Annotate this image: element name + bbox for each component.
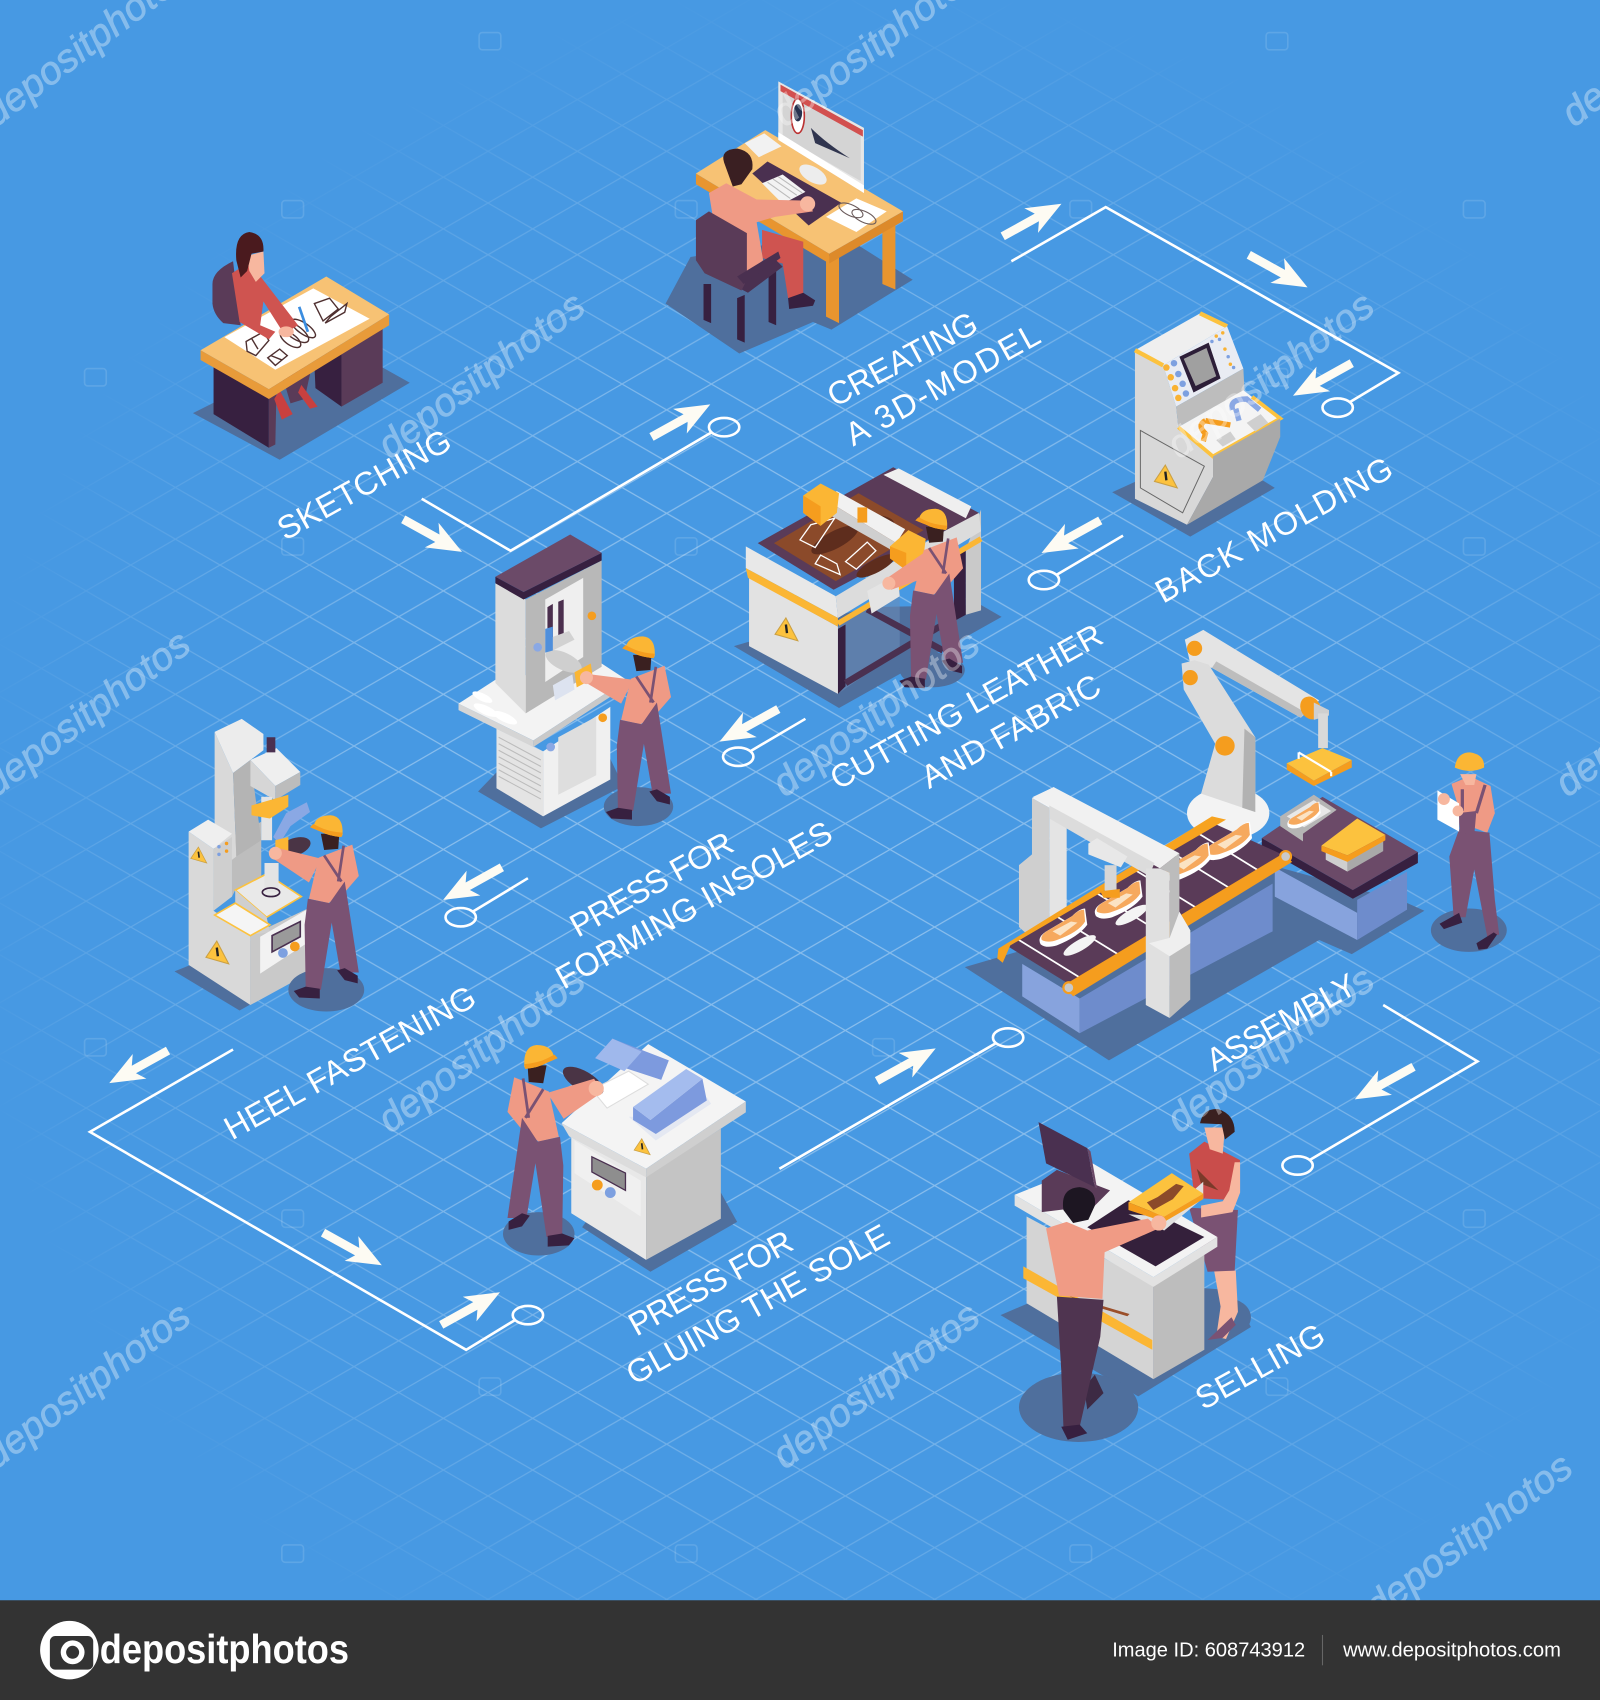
footer bar: depositphotos: [100, 1626, 349, 1672]
right gantry post: [1146, 853, 1190, 1018]
watermarks: depositphotos: [370, 284, 593, 467]
station: press for gluing the sole: [562, 1039, 746, 1272]
stock photo camera marks: [85, 33, 1485, 1562]
flow connector: sketching to insole press: [396, 392, 739, 564]
station: selling counter: [1001, 1109, 1251, 1442]
flow connector: heel fastening to gluing press: [90, 1038, 543, 1350]
step labels: HEEL FASTENING: [218, 979, 482, 1147]
footer logo icon: [40, 1621, 99, 1679]
conveyor: [997, 816, 1292, 1033]
keyboard and papers: [745, 133, 887, 232]
step labels: CUTTING LEATHER: [824, 617, 1109, 796]
station: assembly line: [965, 630, 1424, 1060]
step labels: BACK MOLDING: [1149, 450, 1399, 610]
footer bar: [0, 1600, 1600, 1700]
step labels: GLUING THE SOLE: [620, 1217, 895, 1392]
worker supervising assembly: [1431, 752, 1507, 952]
saleswoman: [1189, 1109, 1240, 1340]
step labels: AND FABRIC: [915, 667, 1107, 795]
watermarks: depositphotos: [370, 958, 593, 1141]
base cabinet: [496, 707, 610, 816]
watermarks: depositphotos: [764, 622, 988, 805]
step labels: CREATING: [821, 305, 983, 414]
desk: [696, 130, 903, 323]
watermarks: depositphotos: [764, 1294, 988, 1477]
worker at insole press: [580, 636, 673, 826]
side table with boxes: [1262, 795, 1418, 940]
station: cutting machine: [734, 467, 1002, 708]
monitor: [778, 81, 864, 193]
cash register monitor: [1038, 1122, 1110, 1212]
station: sketching: [193, 232, 410, 460]
customer: [1046, 1187, 1166, 1440]
station: creating a 3D model: [666, 81, 913, 353]
station: back molding machine: [1112, 313, 1280, 537]
step labels: PRESS FOR: [564, 825, 740, 944]
desk: [201, 276, 389, 448]
watermarks: depositphotos: [1159, 284, 1382, 467]
shoe box: [1128, 1173, 1203, 1231]
flow connector: cutting to insole press: [713, 697, 805, 766]
press column: [495, 535, 602, 713]
base: [189, 820, 308, 1005]
step labels: PRESS FOR: [622, 1223, 799, 1343]
woman sketching: [212, 232, 308, 339]
control panel: [575, 1141, 641, 1216]
machine top: [562, 1039, 746, 1177]
seated designer on chair: [696, 149, 815, 343]
station: press for forming insoles: [459, 535, 627, 828]
footer bar: Image ID: 608743912: [1112, 1640, 1305, 1662]
watermarks: depositphotos: [1357, 1445, 1581, 1628]
worker at gluing press: [503, 1045, 608, 1255]
column: [215, 719, 310, 897]
gantry beam and pusher: [1033, 787, 1179, 898]
tray with molds: [1178, 390, 1280, 456]
door and warning sign: [1140, 430, 1204, 513]
frame legs: [838, 510, 981, 694]
step labels: SKETCHING: [271, 422, 457, 547]
gantry with cutter: [803, 468, 971, 570]
watermarks: depositphotos: [1159, 958, 1382, 1141]
sketches on paper: [246, 298, 347, 365]
step labels: ASSEMBLY: [1200, 966, 1363, 1078]
step labels: SELLING: [1189, 1316, 1331, 1417]
table top: [459, 664, 627, 747]
flow connector: back molding to cutting: [1029, 508, 1123, 589]
step labels: FORMING INSOLES: [550, 814, 838, 996]
cutting table body: [746, 467, 981, 694]
footer bar: www.depositphotos.com: [1342, 1640, 1561, 1662]
flow connector: assembly to selling: [1282, 1005, 1478, 1175]
flow connector: gluing press to assembly: [779, 1028, 1023, 1169]
flow connector: insole press to heel fastening: [436, 855, 528, 926]
control panel: [1163, 326, 1243, 407]
step labels: A 3D-MODEL: [839, 316, 1046, 453]
control box: [867, 575, 900, 614]
flow connector: 3D model to back molding: [996, 191, 1398, 417]
counter: [1015, 1163, 1217, 1379]
station: heel fastening machine: [175, 719, 321, 1010]
step labels: [218, 305, 1399, 1417]
robot arm: [1182, 630, 1352, 839]
left gantry post: [1019, 787, 1069, 954]
worker at cutting machine: [882, 509, 965, 688]
worker at heel machine: [269, 815, 364, 1012]
